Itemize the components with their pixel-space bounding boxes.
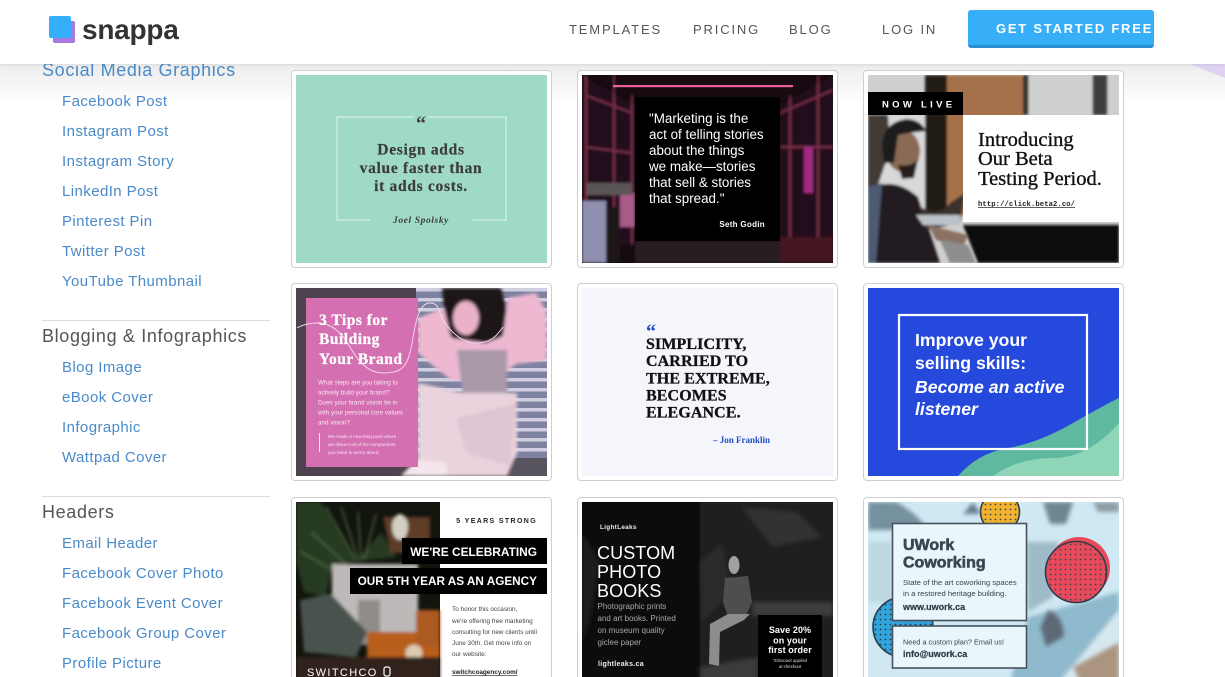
template card: mint quote	[291, 70, 552, 268]
template card: custom photo books	[577, 497, 838, 677]
template card: 3 tips for building your brand: with your personal core values	[317, 410, 403, 416]
template card: UWork coworking: UWork	[903, 537, 954, 554]
template card: custom photo books: first order	[768, 645, 812, 655]
template card: Seth Godin marketing quote: that spread."	[649, 191, 725, 206]
template card: custom photo books: on your	[773, 636, 807, 646]
template card: simplicity quote: SIMPLICITY,	[646, 336, 747, 353]
link: Pinterest Pin	[62, 213, 153, 230]
heading: Headers: Headers	[42, 502, 115, 522]
sidebar navigation	[42, 60, 270, 672]
link: Email Header	[62, 535, 158, 552]
template card: 3 tips for building your brand: we dissect all of the components	[328, 442, 396, 447]
template card: simplicity quote: – Jon Franklin	[712, 435, 770, 445]
template card: Seth Godin marketing quote	[577, 70, 838, 268]
link: Profile Picture	[62, 655, 162, 672]
template card: mint quote: Joel Spolsky	[392, 216, 449, 226]
template card: custom photo books: on museum quality	[598, 626, 665, 635]
template card: 3 tips for building your brand: Does your brand vision tie in	[318, 400, 398, 406]
link: Facebook Event Cover	[62, 595, 223, 612]
link: YouTube Thumbnail	[62, 273, 202, 290]
template card: 3 tips for building your brand: you need to worry about.	[328, 450, 380, 455]
site header bar	[0, 0, 1225, 64]
template card: Switchco anniversary: WE'RE CELEBRATING	[410, 545, 537, 559]
template card: custom photo books: PHOTO	[597, 562, 661, 582]
template card: simplicity quote: THE EXTREME,	[646, 370, 770, 388]
template card: beta testing announcement: NOW LIVE	[882, 100, 955, 110]
button: get started free	[968, 10, 1154, 48]
link: Instagram Story	[62, 153, 174, 170]
template card: Seth Godin marketing quote: we make—stories	[648, 159, 756, 174]
link: Instagram Post	[62, 123, 169, 140]
template card: beta testing announcement: Introducing	[978, 129, 1074, 151]
template card: custom photo books: BOOKS	[597, 581, 662, 601]
template card: custom photo books: Save 20%	[769, 625, 811, 635]
link: Facebook Cover Photo	[62, 565, 224, 582]
template card: Switchco anniversary	[291, 497, 552, 677]
template card: Switchco anniversary: we're offering free marketing	[451, 618, 533, 625]
template card: Switchco anniversary: June 30th. Get more info on	[452, 640, 532, 647]
template card: Switchco anniversary: consulting for new clients until	[452, 629, 537, 636]
nav link: PRICING	[693, 22, 760, 37]
link: Facebook Group Cover	[62, 625, 226, 642]
sidebar category list	[42, 60, 270, 672]
link: Blog Image	[62, 359, 142, 376]
template card: UWork coworking: State of the art coworking spaces	[903, 578, 1017, 587]
link: eBook Cover	[62, 389, 153, 406]
template card: custom photo books: lightleaks.ca	[598, 661, 644, 668]
template card: UWork coworking: www.uwork.ca	[902, 602, 966, 612]
wordmark: snappa	[82, 14, 179, 45]
template card: mint quote: it adds costs.	[374, 178, 468, 195]
template card: improve your selling skills: Improve your	[915, 330, 1027, 350]
template card: 3 tips for building your brand: Building	[319, 331, 380, 348]
template card: UWork coworking: info@uwork.ca	[903, 649, 968, 659]
template card: improve your selling skills	[863, 283, 1124, 481]
template card: mint quote: Design adds	[377, 142, 465, 158]
template card: beta testing announcement: Testing Period.	[978, 168, 1102, 190]
link: Wattpad Cover	[62, 449, 167, 466]
template card: Seth Godin marketing quote: that sell & stories	[649, 175, 751, 190]
link: Facebook Post	[62, 93, 168, 110]
template card: UWork coworking: Need a custom plan? Email us!	[903, 638, 1004, 646]
template card: simplicity quote: ELEGANCE.	[646, 404, 741, 422]
template card: Seth Godin marketing quote: about the things	[649, 143, 745, 158]
template card: improve your selling skills: selling skills:	[915, 353, 1026, 373]
template card: UWork coworking: Coworking	[903, 554, 986, 572]
template card: 3 tips for building your brand: Your Brand	[319, 351, 403, 368]
button: get started free: GET STARTED FREE	[996, 21, 1153, 36]
template card: custom photo books: Photographic prints	[598, 602, 666, 611]
template card: 3 tips for building your brand	[291, 283, 552, 481]
template card: custom photo books: and art books. Printed	[598, 614, 676, 623]
decorative purple corner shape	[1190, 64, 1225, 78]
template card: Switchco anniversary: switchcoagency.com/	[452, 669, 518, 676]
template card: Switchco anniversary: our website:	[452, 651, 487, 658]
template card: beta testing announcement	[863, 70, 1124, 268]
template card: Switchco anniversary: OUR 5TH YEAR AS AN AGENCY	[358, 575, 537, 588]
template card: UWork coworking	[863, 497, 1124, 677]
template card: 3 tips for building your brand: 3 Tips for	[319, 312, 388, 329]
link: Infographic	[62, 419, 141, 436]
template card: 3 tips for building your brand: What steps are you taking to	[318, 380, 398, 386]
template card: Seth Godin marketing quote: Seth Godin	[719, 220, 765, 229]
template card: simplicity quote	[577, 283, 838, 481]
template card: mint quote: value faster than	[360, 160, 482, 177]
template card: custom photo books: CUSTOM	[597, 543, 675, 563]
template card: simplicity quote: BECOMES	[646, 388, 727, 404]
template card: improve your selling skills: Become an active	[915, 377, 1065, 397]
heading: Social Media Graphics: Social Media Graphics	[42, 60, 236, 80]
template card: Seth Godin marketing quote: "Marketing is the	[649, 111, 748, 126]
template card: Switchco anniversary: 5 YEARS STRONG	[456, 518, 537, 525]
template card: beta testing announcement: http://click.beta2.co/	[978, 201, 1075, 209]
template card: Seth Godin marketing quote: act of telling stories	[649, 127, 764, 142]
heading: Blogging & Infographics: Blogging & Infographics	[42, 326, 247, 346]
template card: custom photo books: at checkout	[779, 664, 802, 669]
template card: custom photo books: giclee paper	[598, 638, 641, 647]
template card: improve your selling skills: listener	[915, 399, 979, 419]
nav link: TEMPLATES	[569, 22, 662, 37]
template card: custom photo books: *Discount applied	[773, 658, 808, 663]
template card: 3 tips for building your brand: and vision?	[318, 420, 350, 426]
nav link: LOG IN	[882, 22, 937, 37]
template card: simplicity quote: CARRIED TO	[646, 353, 748, 370]
logo icon: stacked squares	[49, 16, 75, 43]
logo: snappa	[49, 14, 179, 45]
nav link: BLOG	[789, 22, 833, 37]
template card: 3 tips for building your brand: actively build your brand?	[318, 390, 390, 396]
template card: 3 tips for building your brand: We made a new blog post where	[328, 434, 397, 439]
link: LinkedIn Post	[62, 183, 158, 200]
template card: simplicity quote: “	[646, 321, 656, 343]
template card: custom photo books: LightLeaks	[600, 524, 637, 531]
link: Twitter Post	[62, 243, 145, 260]
template card: mint quote: “	[416, 113, 426, 135]
template card: Switchco anniversary: To honor this occasion,	[452, 606, 518, 613]
template card: UWork coworking: in a restored heritage building.	[903, 589, 1006, 598]
template card: beta testing announcement: Our Beta	[978, 148, 1053, 170]
